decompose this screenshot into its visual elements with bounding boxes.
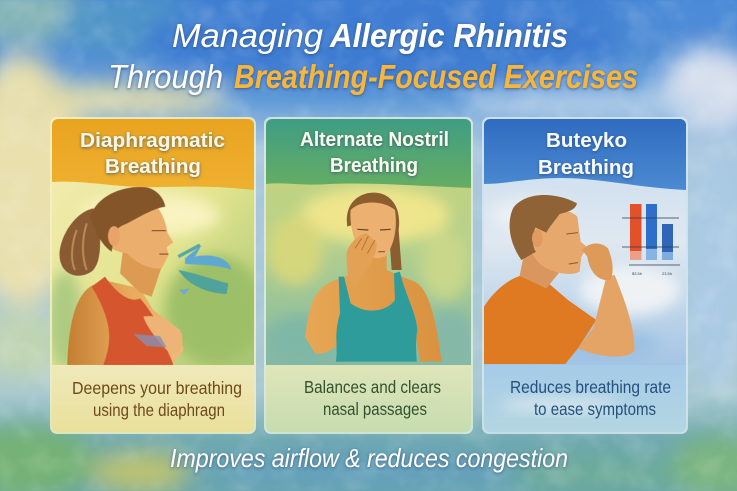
chart: small bar chart: $3.5h: [632, 271, 642, 276]
caption: alternate nostril breathing: Balances and clears: [304, 377, 441, 397]
figure: man pinching his nose: [484, 195, 635, 364]
caption: diaphragmatic breathing: using the diaphragn: [93, 400, 225, 420]
heading: alternate nostril breathing: [300, 129, 449, 177]
caption: diaphragmatic breathing: [72, 378, 242, 420]
caption: buteyko breathing: to ease symptoms: [534, 399, 656, 419]
heading: buteyko breathing: Buteyko: [546, 130, 627, 152]
caption: alternate nostril breathing: [304, 377, 441, 419]
caption: buteyko breathing: [510, 377, 671, 419]
caption: diaphragmatic breathing: Deepens your breathing: [72, 378, 242, 398]
title: Managing: [172, 17, 324, 54]
title: Through: [108, 58, 223, 95]
figure: woman with ponytail and hand on chest: [60, 187, 232, 365]
heading: diaphragmatic breathing: Diaphragmatic: [80, 130, 225, 152]
panel: diaphragmatic breathing: [47, 117, 265, 434]
heading: diaphragmatic breathing: Breathing: [105, 156, 201, 178]
panel: buteyko breathing: [482, 117, 688, 434]
footer tagline: Improves airflow & reduces congestion: [170, 443, 568, 473]
figure: woman closing one nostril: [305, 193, 442, 362]
title: Allergic Rhinitis: [329, 17, 568, 54]
caption: buteyko breathing: Reduces breathing rate: [510, 377, 671, 397]
panel: alternate nostril breathing: [264, 117, 475, 434]
chart: small bar chart: [622, 204, 680, 276]
caption: alternate nostril breathing: nasal passages: [323, 399, 427, 419]
title: Breathing-Focused Exercises: [234, 58, 638, 95]
chart: small bar chart: 23.5h: [662, 271, 672, 276]
heading: alternate nostril breathing: Breathing: [330, 155, 418, 177]
heading: buteyko breathing: Breathing: [538, 157, 634, 179]
heading: diaphragmatic breathing: [80, 130, 225, 178]
title: [108, 17, 638, 95]
heading: alternate nostril breathing: Alternate Nostril: [300, 129, 449, 151]
heading: buteyko breathing: [538, 130, 634, 179]
